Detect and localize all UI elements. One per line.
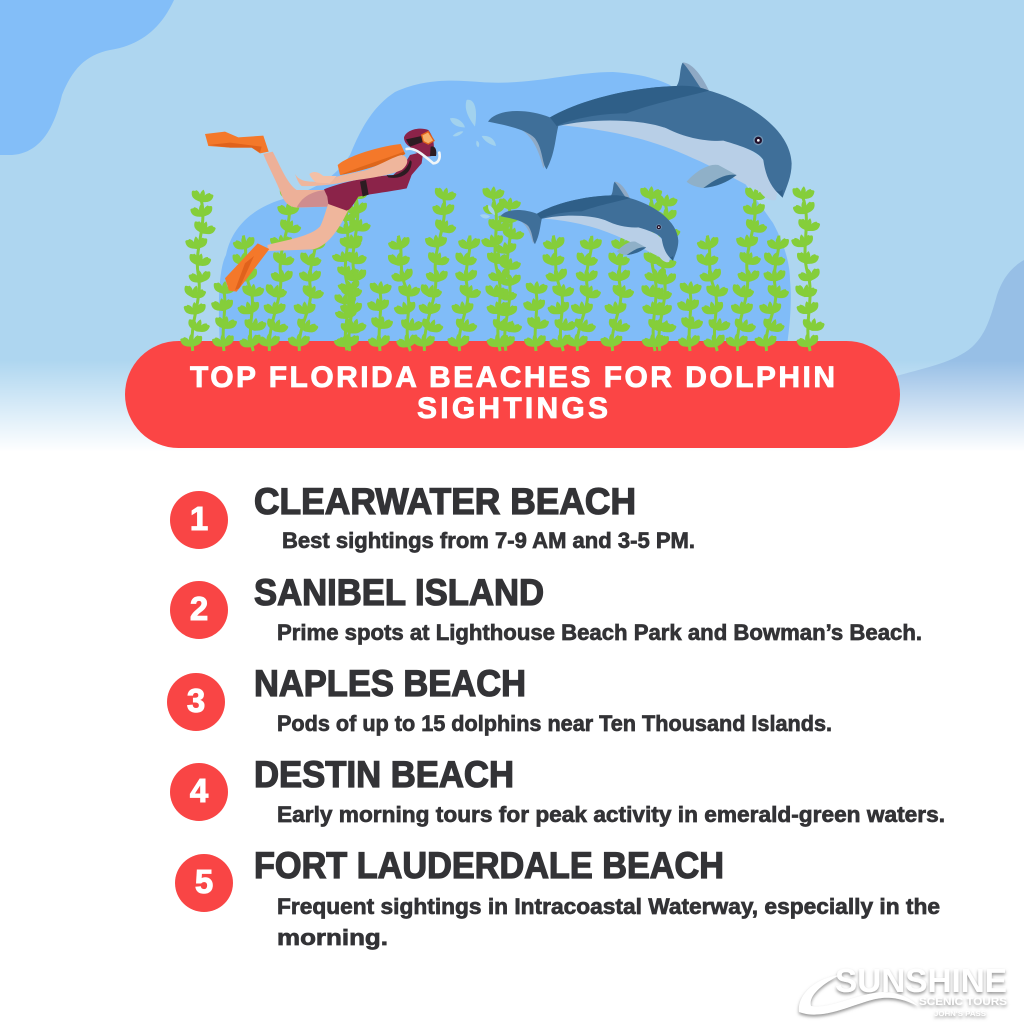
background blob: lower right xyxy=(880,260,1024,450)
number badge 2 xyxy=(170,581,228,639)
diver far leg xyxy=(263,152,328,208)
number badge 5 xyxy=(175,854,233,912)
fade to white xyxy=(0,360,1024,452)
description 5 second line: morning. xyxy=(277,925,388,950)
diver arm xyxy=(295,155,407,186)
number badge 1: 1 xyxy=(190,500,208,537)
seaweed row xyxy=(177,184,826,353)
diver snorkel xyxy=(407,149,440,163)
heading 1: CLEARWATER BEACH xyxy=(254,481,636,522)
background: sky-blue panel xyxy=(0,0,1024,460)
diver wetsuit xyxy=(324,152,423,211)
logo: Sunshine Scenic Tours: SCENIC TOURS xyxy=(919,996,1007,1008)
description 3: Pods of up to 15 dolphins near Ten Thousand Islands. xyxy=(277,711,832,736)
diver near leg xyxy=(267,203,348,251)
description 5: Frequent sightings in Intracoastal Waterway, especially in the xyxy=(277,894,940,919)
logo: Sunshine Scenic Tours: JOHN'S PASS xyxy=(934,1011,986,1018)
heading 5: FORT LAUDERDALE BEACH xyxy=(254,845,724,886)
logo: Sunshine Scenic Tours: SUNSHINE xyxy=(835,962,1007,999)
number badge 1 xyxy=(170,491,228,549)
number badge 2: 2 xyxy=(190,590,208,627)
description 4: Early morning tours for peak activity in emerald-green waters. xyxy=(277,802,945,827)
list item 4 xyxy=(170,754,945,827)
description 1: Best sightings from 7-9 AM and 3-5 PM. xyxy=(282,528,695,553)
illustration: large dolphin xyxy=(488,62,792,200)
list item 2 xyxy=(170,572,922,645)
illustration: scuba diver xyxy=(205,129,440,292)
heading 3: NAPLES BEACH xyxy=(254,663,526,704)
white lower panel xyxy=(0,451,1024,1024)
number badge 4 xyxy=(170,763,228,821)
logo: Sunshine Scenic Tours xyxy=(799,962,1007,1018)
heading 4: DESTIN BEACH xyxy=(254,754,514,795)
title banner xyxy=(125,341,900,448)
number badge 3: 3 xyxy=(187,682,205,719)
icon: water splash xyxy=(450,100,496,218)
diver air tank xyxy=(338,144,405,175)
number badge 4: 4 xyxy=(190,772,209,809)
number badge 3 xyxy=(167,673,225,731)
illustration: small dolphin xyxy=(501,182,678,262)
list item 5 xyxy=(175,845,940,950)
title line 2: SIGHTINGS xyxy=(417,392,608,425)
background blob: top left xyxy=(0,0,174,155)
description 2: Prime spots at Lighthouse Beach Park and Bowman’s Beach. xyxy=(277,620,922,645)
background blob: centre xyxy=(219,72,791,345)
number badge 5: 5 xyxy=(195,863,213,900)
title: TOP FLORIDA BEACHES FOR DOLPHIN xyxy=(190,361,835,394)
list item 1 xyxy=(170,481,695,553)
list item 3 xyxy=(167,663,832,736)
diver hood and mask xyxy=(404,129,434,156)
heading 2: SANIBEL ISLAND xyxy=(254,572,544,613)
